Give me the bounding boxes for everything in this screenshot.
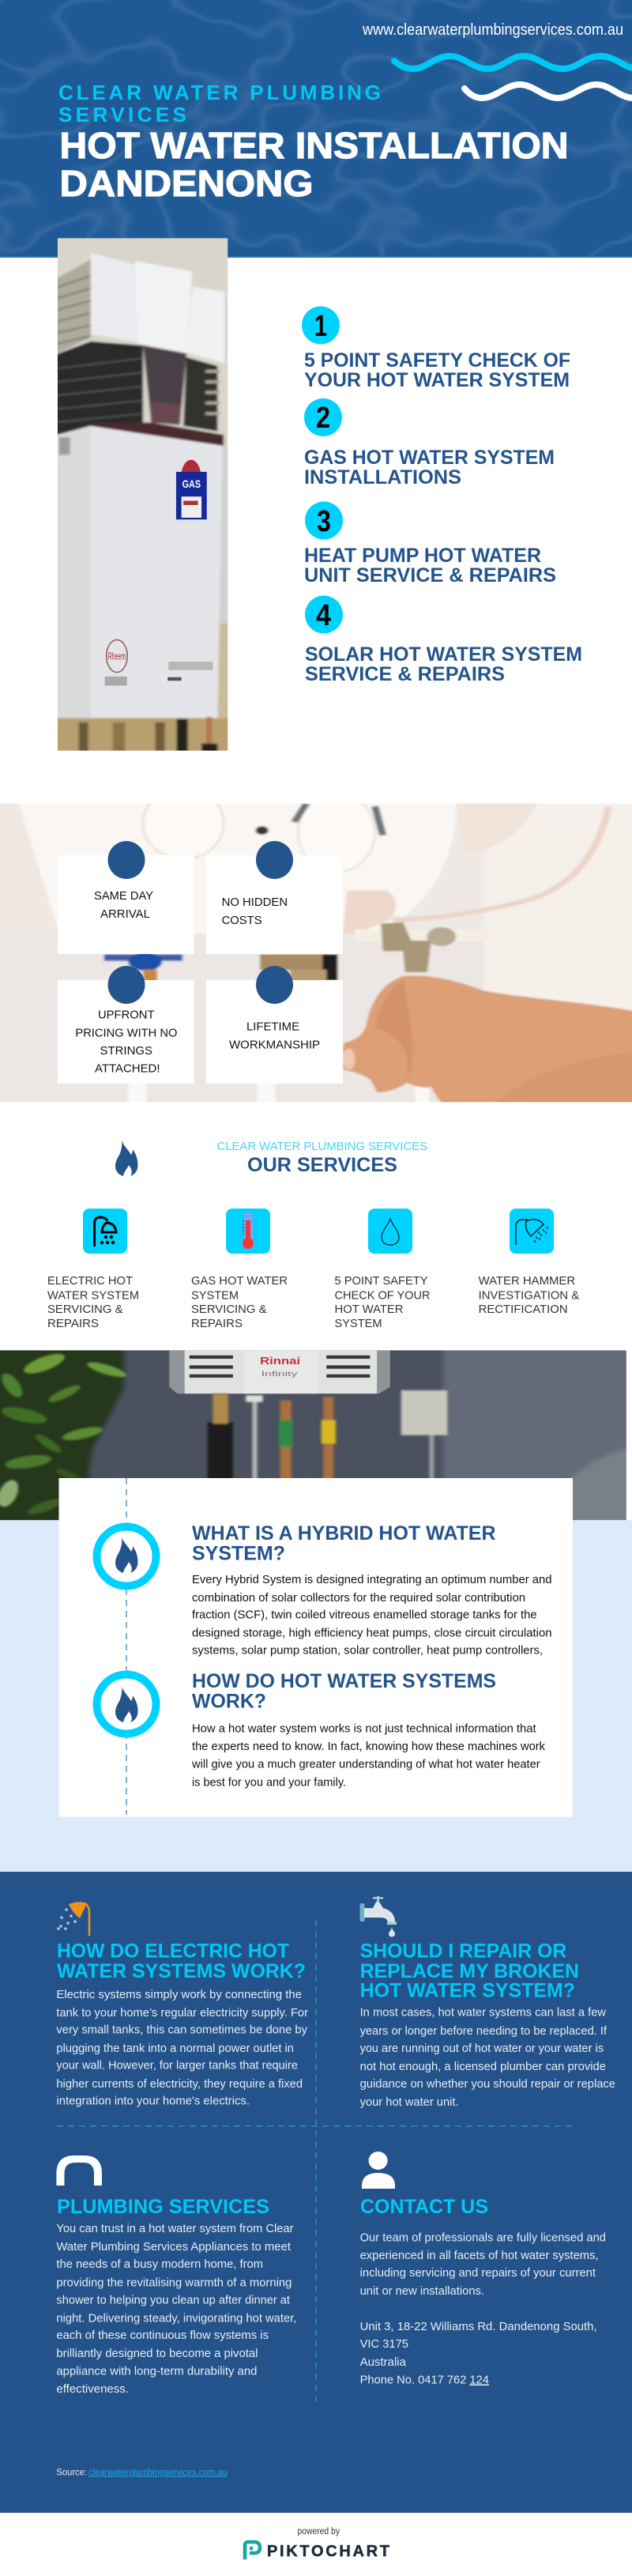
card: upfront pricing [58, 966, 194, 1084]
card: upfront pricing: PRICING WITH NO [75, 1027, 177, 1040]
card: upfront pricing: STRINGS [100, 1044, 152, 1058]
icon: shower head [510, 1209, 554, 1254]
block: electric systems: HOW DO ELECTRIC HOT [57, 1940, 289, 1963]
service: electric: SERVICING & [47, 1303, 123, 1316]
decorative cyan wave [394, 56, 632, 69]
item 4: SERVICE & REPAIRS [305, 663, 505, 685]
block: repair or replace: you are running out of hot water or your water is [360, 2042, 604, 2055]
service: electric: WATER SYSTEM [47, 1288, 139, 1302]
title [60, 125, 569, 204]
footer: piktochart branding: powered by [297, 2527, 340, 2536]
panel: dark blue information [0, 1872, 632, 2513]
block: electric systems: Electric systems simply work by connecting the [56, 1988, 302, 2001]
title: DANDENONG [60, 163, 313, 204]
subtitle: CLEAR WATER PLUMBING [58, 81, 381, 104]
text: hybrid system: fraction (SCF), twin coiled vitreous enamelled storage tanks for the [192, 1609, 537, 1622]
decorative white wave [465, 85, 632, 98]
card: lifetime workmanship [206, 966, 343, 1084]
our services section [47, 1140, 579, 1330]
block: plumbing services: You can trust in a hot water system from Clear [56, 2222, 293, 2235]
card: same day arrival: ARRIVAL [100, 907, 150, 921]
icon: piktochart logo [245, 2542, 260, 2559]
icon: person [362, 2152, 395, 2189]
item 1: 5 POINT SAFETY CHECK OF [304, 349, 570, 372]
block: contact us: unit or new installations. [360, 2284, 484, 2298]
block: contact us: including servicing and repairs of your current [360, 2266, 596, 2280]
icon: thermometer [226, 1209, 270, 1254]
card: no hidden costs: NO HIDDEN [222, 896, 288, 909]
block: repair or replace: REPLACE MY BROKEN [360, 1960, 579, 1982]
block: contact us: Our team of professionals are fully licensed and [360, 2231, 606, 2245]
block: contact us: Unit 3, 18-22 Williams Rd. Dandenong South, [360, 2320, 597, 2333]
section heading: OUR SERVICES [247, 1154, 397, 1176]
text: how systems work [191, 1722, 545, 1789]
block: repair or replace: not hot enough, a licensed plumber can provide [360, 2060, 606, 2073]
block: electric systems: very small tanks, this can sometimes be done by [56, 2023, 307, 2037]
block: repair or replace: SHOULD I REPAIR OR [360, 1940, 566, 1963]
block: plumbing services: the needs of a busy modern home, from [56, 2257, 263, 2271]
heading: hybrid system: SYSTEM? [192, 1543, 285, 1565]
heater body: Rinnai [260, 1355, 300, 1367]
text: how systems work: will give you a much greater understanding of what hot water heater [191, 1758, 540, 1771]
item 4: SOLAR HOT WATER SYSTEM [305, 643, 582, 666]
brand logo [105, 639, 127, 685]
block: plumbing services: each of these continuous flow systems is [56, 2329, 269, 2342]
icon: tap [360, 1896, 397, 1937]
subtitle [58, 81, 381, 126]
card: lifetime workmanship: WORKMANSHIP [229, 1039, 320, 1052]
icon: shower [83, 1209, 127, 1254]
photo: tankless heater on wall [0, 1350, 626, 1521]
service: safety check: SYSTEM [335, 1317, 382, 1330]
service: gas: REPAIRS [191, 1317, 243, 1330]
card: lifetime workmanship: LIFETIME [246, 1020, 299, 1034]
icon: flame badge 2 [96, 1674, 156, 1734]
block: plumbing services: Water Plumbing Services Appliances to meet [56, 2240, 292, 2254]
block: electric systems: your wall. However, for larger tanks that require [56, 2059, 298, 2072]
heading: how systems work: HOW DO HOT WATER SYSTEMS [192, 1670, 496, 1692]
service: gas: GAS HOT WATER [191, 1274, 288, 1288]
block: repair or replace [360, 1896, 615, 2109]
text: how systems work: is best for you and your family. [192, 1775, 346, 1789]
service: water hammer: WATER HAMMER [479, 1274, 575, 1288]
heater body [169, 1350, 390, 1394]
text: hybrid system: designed storage, high efficiency heat pumps, close circuit circulation [192, 1626, 551, 1639]
block: contact us: Phone No. 0417 762 124 [360, 2373, 489, 2387]
card: same day arrival: SAME DAY [94, 889, 153, 903]
text: how systems work: How a hot water system works is not just technical information that [192, 1722, 536, 1736]
heading: hybrid system [192, 1522, 496, 1565]
item 1: 1 [314, 310, 327, 343]
photo: plumber hand at heater [0, 788, 632, 1115]
service: electric [47, 1209, 139, 1330]
item 1 [302, 307, 570, 391]
block: contact us: Australia [360, 2355, 407, 2369]
section heading [216, 1140, 427, 1176]
card: same day arrival [58, 841, 194, 954]
service: safety check: HOT WATER [335, 1303, 404, 1316]
service: water hammer: RECTIFICATION [479, 1303, 568, 1316]
header banner [0, 0, 632, 258]
block: electric systems: integration into your home's electrics. [56, 2095, 250, 2108]
light blue background band [0, 1520, 632, 1872]
item 3 [304, 501, 556, 586]
icon: flame [115, 1140, 137, 1176]
source line: clearwaterplumbingservices.com.au [88, 2468, 228, 2477]
block: electric systems: tank to your home’s regular electricity supply. For [56, 2006, 308, 2020]
text: hybrid system [192, 1573, 551, 1658]
heading: hybrid system: WHAT IS A HYBRID HOT WATER [192, 1522, 496, 1544]
service: safety check [335, 1209, 431, 1330]
item 3: HEAT PUMP HOT WATER [304, 545, 541, 567]
title: HOT WATER INSTALLATION [60, 125, 569, 166]
block: contact us: experienced in all facets of hot water systems, [360, 2249, 599, 2262]
block: contact us: CONTACT US [360, 2196, 488, 2218]
item 2: GAS HOT WATER SYSTEM [304, 447, 555, 469]
service: gas: SYSTEM [191, 1288, 239, 1302]
block: repair or replace: guidance on whether you should repair or replace [360, 2077, 615, 2091]
service: electric: ELECTRIC HOT [47, 1274, 133, 1288]
numbered services list [302, 307, 582, 685]
block: electric systems: WATER SYSTEMS WORK? [57, 1960, 306, 1982]
item 2 [304, 398, 555, 488]
block: repair or replace: years or longer before needing to be replaced. If [360, 2024, 608, 2038]
service: gas: SERVICING & [191, 1303, 267, 1316]
block: plumbing services: shower to helping you clean up after dinner at [56, 2294, 291, 2307]
service: electric: REPAIRS [47, 1317, 99, 1330]
card: upfront pricing: ATTACHED! [95, 1062, 160, 1076]
block: repair or replace: your hot water unit. [360, 2095, 459, 2109]
block: electric systems [56, 1902, 308, 2108]
heater body: Infinity [261, 1371, 299, 1379]
card: no hidden costs: COSTS [222, 914, 262, 927]
block: plumbing services: providing the revitalising warmth of a morning [56, 2276, 292, 2289]
block: plumbing services: effectiveness. [56, 2382, 129, 2396]
card: upfront pricing: UPFRONT [98, 1009, 155, 1022]
footer: piktochart branding: PIKTOCHART [267, 2543, 389, 2560]
icon: pipe arch [56, 2155, 102, 2186]
text: how systems work: the experts need to know. In fact, knowing how these machines work [192, 1740, 545, 1753]
section heading: CLEAR WATER PLUMBING SERVICES [216, 1140, 427, 1153]
plant leaves [0, 1350, 129, 1518]
card: no hidden costs [206, 841, 343, 954]
service: safety check: CHECK OF YOUR [335, 1288, 431, 1302]
brand logo: Rheem [108, 651, 126, 662]
text: hybrid system: Every Hybrid System is designed integrating an optimum number and [192, 1573, 551, 1586]
item 2: INSTALLATIONS [304, 466, 461, 488]
source line: Source: [56, 2468, 87, 2477]
item 1: YOUR HOT WATER SYSTEM [304, 369, 570, 391]
service: water hammer [479, 1209, 579, 1316]
block: repair or replace: In most cases, hot water systems can last a few [360, 2006, 606, 2020]
block: contact us: VIC 3175 [360, 2337, 408, 2351]
block: electric systems: plugging the tank into a normal power outlet in [56, 2042, 294, 2055]
item 3: UNIT SERVICE & REPAIRS [304, 564, 556, 586]
item 2: 2 [316, 402, 330, 435]
icon: orange shower [57, 1902, 89, 1936]
text: hybrid system: combination of solar collectors for the required solar contribution [192, 1591, 525, 1605]
service: safety check: 5 POINT SAFETY [335, 1274, 428, 1288]
block: plumbing services: PLUMBING SERVICES [57, 2196, 269, 2218]
heading: how systems work [192, 1670, 496, 1712]
block: plumbing services: brilliantly designed to become a pivotal [56, 2347, 258, 2360]
block: plumbing services: night. Delivering steady, invigorating hot water, [56, 2311, 296, 2325]
item 4: 4 [316, 599, 331, 632]
service: water hammer: INVESTIGATION & [479, 1288, 579, 1302]
panel: hybrid info card [58, 1478, 573, 1816]
item 3: 3 [317, 505, 331, 538]
service: gas [191, 1209, 288, 1330]
block: repair or replace: HOT WATER SYSTEM? [360, 1980, 575, 2002]
footer: piktochart branding [0, 2513, 632, 2576]
block: contact us [360, 2152, 606, 2387]
block: plumbing services [56, 2155, 296, 2396]
block: plumbing services: appliance with long-term durability and [56, 2365, 257, 2378]
heading: how systems work: WORK? [192, 1690, 266, 1712]
icon: flame badge 1 [96, 1527, 156, 1586]
icon: water drop [368, 1209, 412, 1254]
item 4 [305, 596, 582, 685]
block: electric systems: higher currents of electricity, they require a fixed [56, 2077, 303, 2091]
subtitle: SERVICES [58, 103, 186, 126]
photo: water heater unit [57, 238, 228, 751]
text: hybrid system: systems, solar pump station, solar controller, heat pump controllers, [192, 1644, 543, 1658]
gas label: GAS [182, 479, 201, 491]
gas label [176, 460, 207, 519]
benefit cards [58, 841, 343, 1084]
